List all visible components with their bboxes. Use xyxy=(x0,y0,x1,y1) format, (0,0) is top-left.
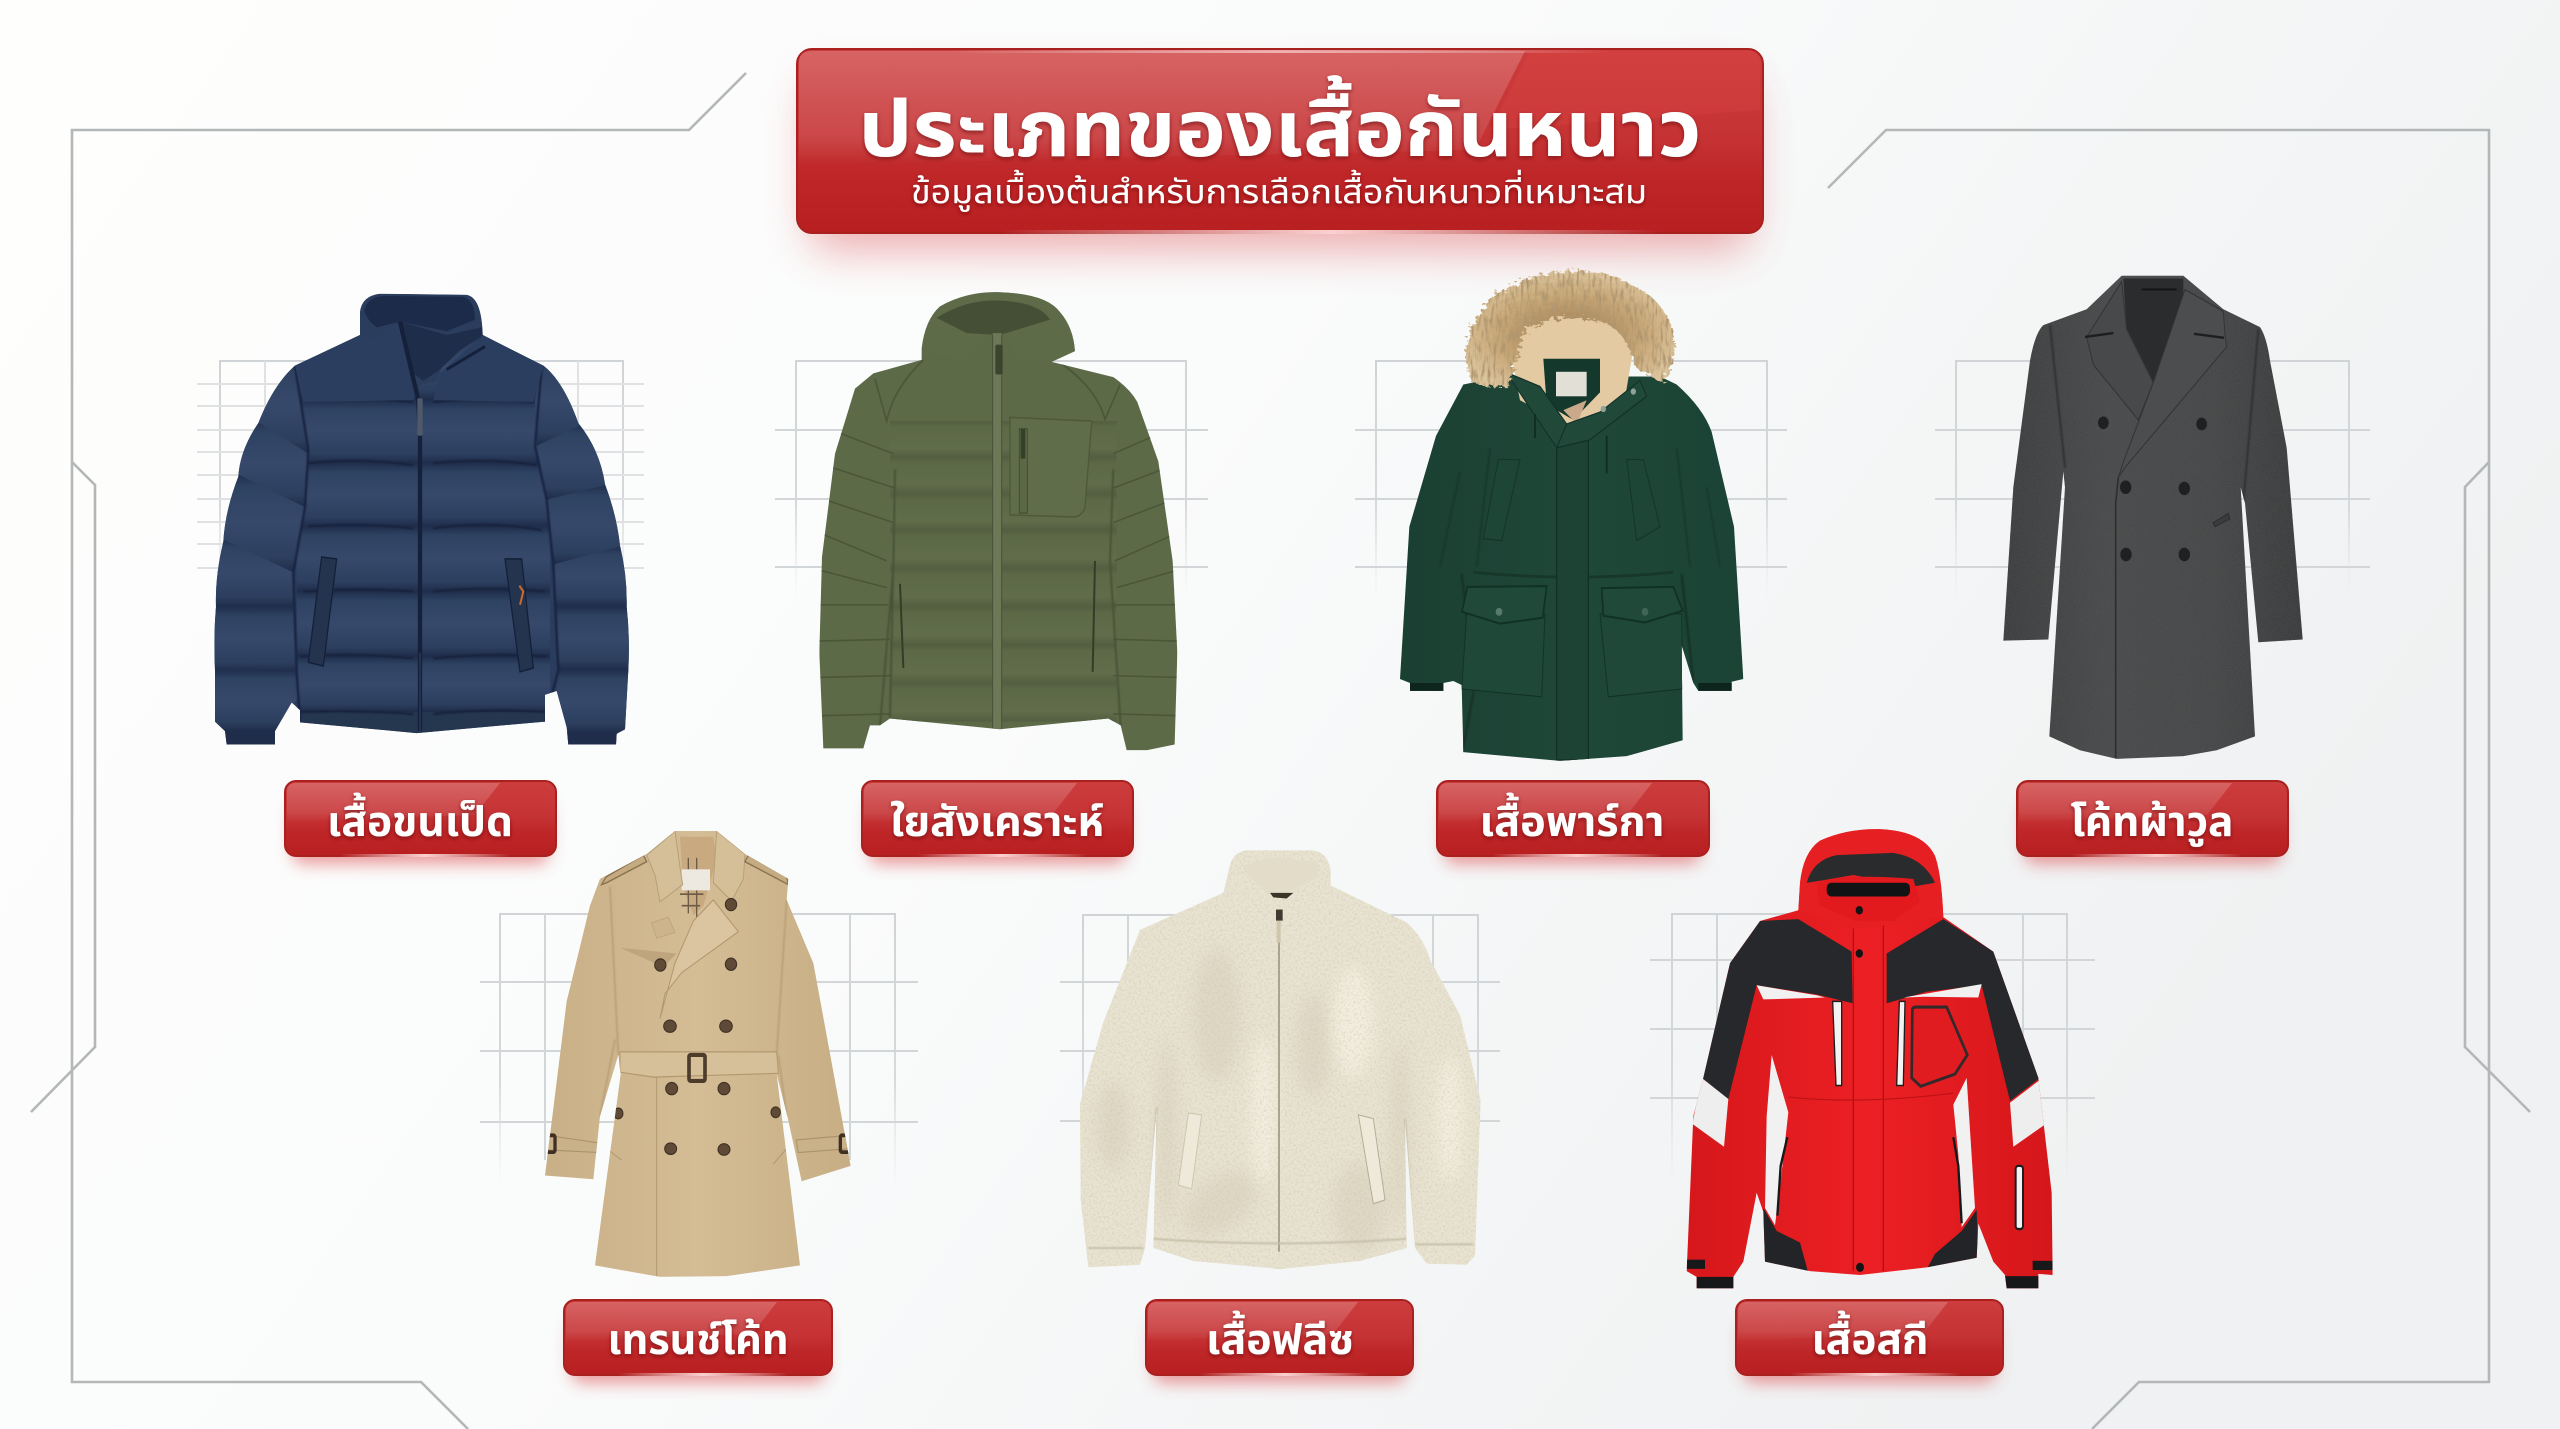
pocket xyxy=(2213,513,2230,527)
label: เสื้อฟลีซ: เสื้อฟลีซ xyxy=(1206,1310,1354,1363)
D pocket xyxy=(1912,1007,1967,1086)
hood xyxy=(922,292,1075,362)
flap pockets xyxy=(1462,614,1545,697)
chest welts xyxy=(1483,460,1520,541)
placket xyxy=(1853,906,1883,1271)
jacket 6: cream fleece jacket xyxy=(1080,850,1481,1269)
hood lining xyxy=(1507,311,1637,428)
jacket 4: charcoal wool overcoat xyxy=(2003,276,2303,759)
buttons xyxy=(614,898,780,1155)
big lapel xyxy=(660,900,738,1019)
chest pocket xyxy=(1010,417,1092,517)
label: เสื้อขนเป็ด: เสื้อขนเป็ด xyxy=(327,792,513,845)
lapels xyxy=(2087,282,2153,420)
label: เสื้อสกี xyxy=(1736,1300,2003,1383)
pockets xyxy=(1178,1113,1202,1189)
label: เสื้อพาร์กา xyxy=(1437,781,1709,864)
belt xyxy=(620,1052,778,1077)
buttons xyxy=(2098,416,2207,562)
storm flap xyxy=(620,948,677,967)
label: เสื้อพาร์กา: เสื้อพาร์กา xyxy=(1480,792,1664,845)
label: โค้ทผ้าวูล xyxy=(2017,781,2288,864)
title text: ประเภทของเสื้อกันหนาว xyxy=(858,75,1702,173)
black yokes xyxy=(1702,919,1853,1099)
fur trim xyxy=(1466,271,1675,387)
side pockets xyxy=(900,561,1095,672)
collar flap xyxy=(1507,373,1647,448)
jacket 1: navy down puffer xyxy=(210,289,633,748)
neck lining with check xyxy=(680,837,717,915)
side pockets xyxy=(1777,1137,1962,1223)
label: เสื้อขนเป็ด xyxy=(285,781,556,864)
chest zips xyxy=(1833,1001,1842,1086)
centre zipper xyxy=(993,333,1002,729)
fleece shading xyxy=(1097,948,1410,1252)
cuffs xyxy=(1695,1277,1734,1290)
epaulets xyxy=(602,855,647,885)
cuff straps xyxy=(546,1135,599,1153)
waist drawcord xyxy=(1473,572,1673,577)
cuffs xyxy=(225,731,275,744)
collar xyxy=(360,294,483,385)
black hem panels xyxy=(1763,1208,1808,1273)
zipper xyxy=(1276,911,1282,1252)
hem and cuffs xyxy=(1088,1239,1473,1248)
label: ใยสังเคราะห์: ใยสังเคราะห์ xyxy=(890,798,1104,845)
jacket 3: green parka with fur hood xyxy=(1393,271,1750,768)
placket xyxy=(1557,440,1588,760)
quilting seams xyxy=(300,399,547,714)
neck lining xyxy=(2123,278,2183,382)
label: โค้ทผ้าวูล: โค้ทผ้าวูล xyxy=(2070,798,2234,847)
centre seam and pockets xyxy=(607,1078,787,1276)
label: ใยสังเคราะห์ xyxy=(862,781,1133,864)
zipper xyxy=(400,322,420,731)
collar xyxy=(647,831,683,902)
snaps xyxy=(1856,906,1863,914)
neck inside xyxy=(1243,858,1318,893)
jacket 5: beige trench coat xyxy=(540,825,857,1285)
white bands xyxy=(1757,985,1825,999)
jacket 7: red, black and white ski jacket xyxy=(1683,825,2057,1292)
hood xyxy=(1798,829,1943,929)
blueprint grids behind jackets xyxy=(197,361,2370,1190)
label: เทรนช์โค้ท: เทรนช์โค้ท xyxy=(608,1316,788,1363)
label: เทรนช์โค้ท xyxy=(564,1300,832,1383)
jacket 2: olive synthetic insulated hooded jacket xyxy=(813,285,1183,756)
yoke panel xyxy=(295,335,543,402)
front edge xyxy=(2116,477,2118,758)
pockets xyxy=(308,557,337,666)
raglan seams xyxy=(875,360,1120,421)
label: เสื้อฟลีซ xyxy=(1146,1300,1413,1383)
label: เสื้อสกี: เสื้อสกี xyxy=(1812,1310,1928,1363)
title banner xyxy=(797,49,1763,250)
sleeve zip xyxy=(2016,1166,2023,1229)
cuffs xyxy=(1410,683,1444,692)
subtitle text: ข้อมูลเบื้องต้นสำหรับการเลือกเสื้อกันหนาวที่เหมาะสม xyxy=(911,169,1647,212)
